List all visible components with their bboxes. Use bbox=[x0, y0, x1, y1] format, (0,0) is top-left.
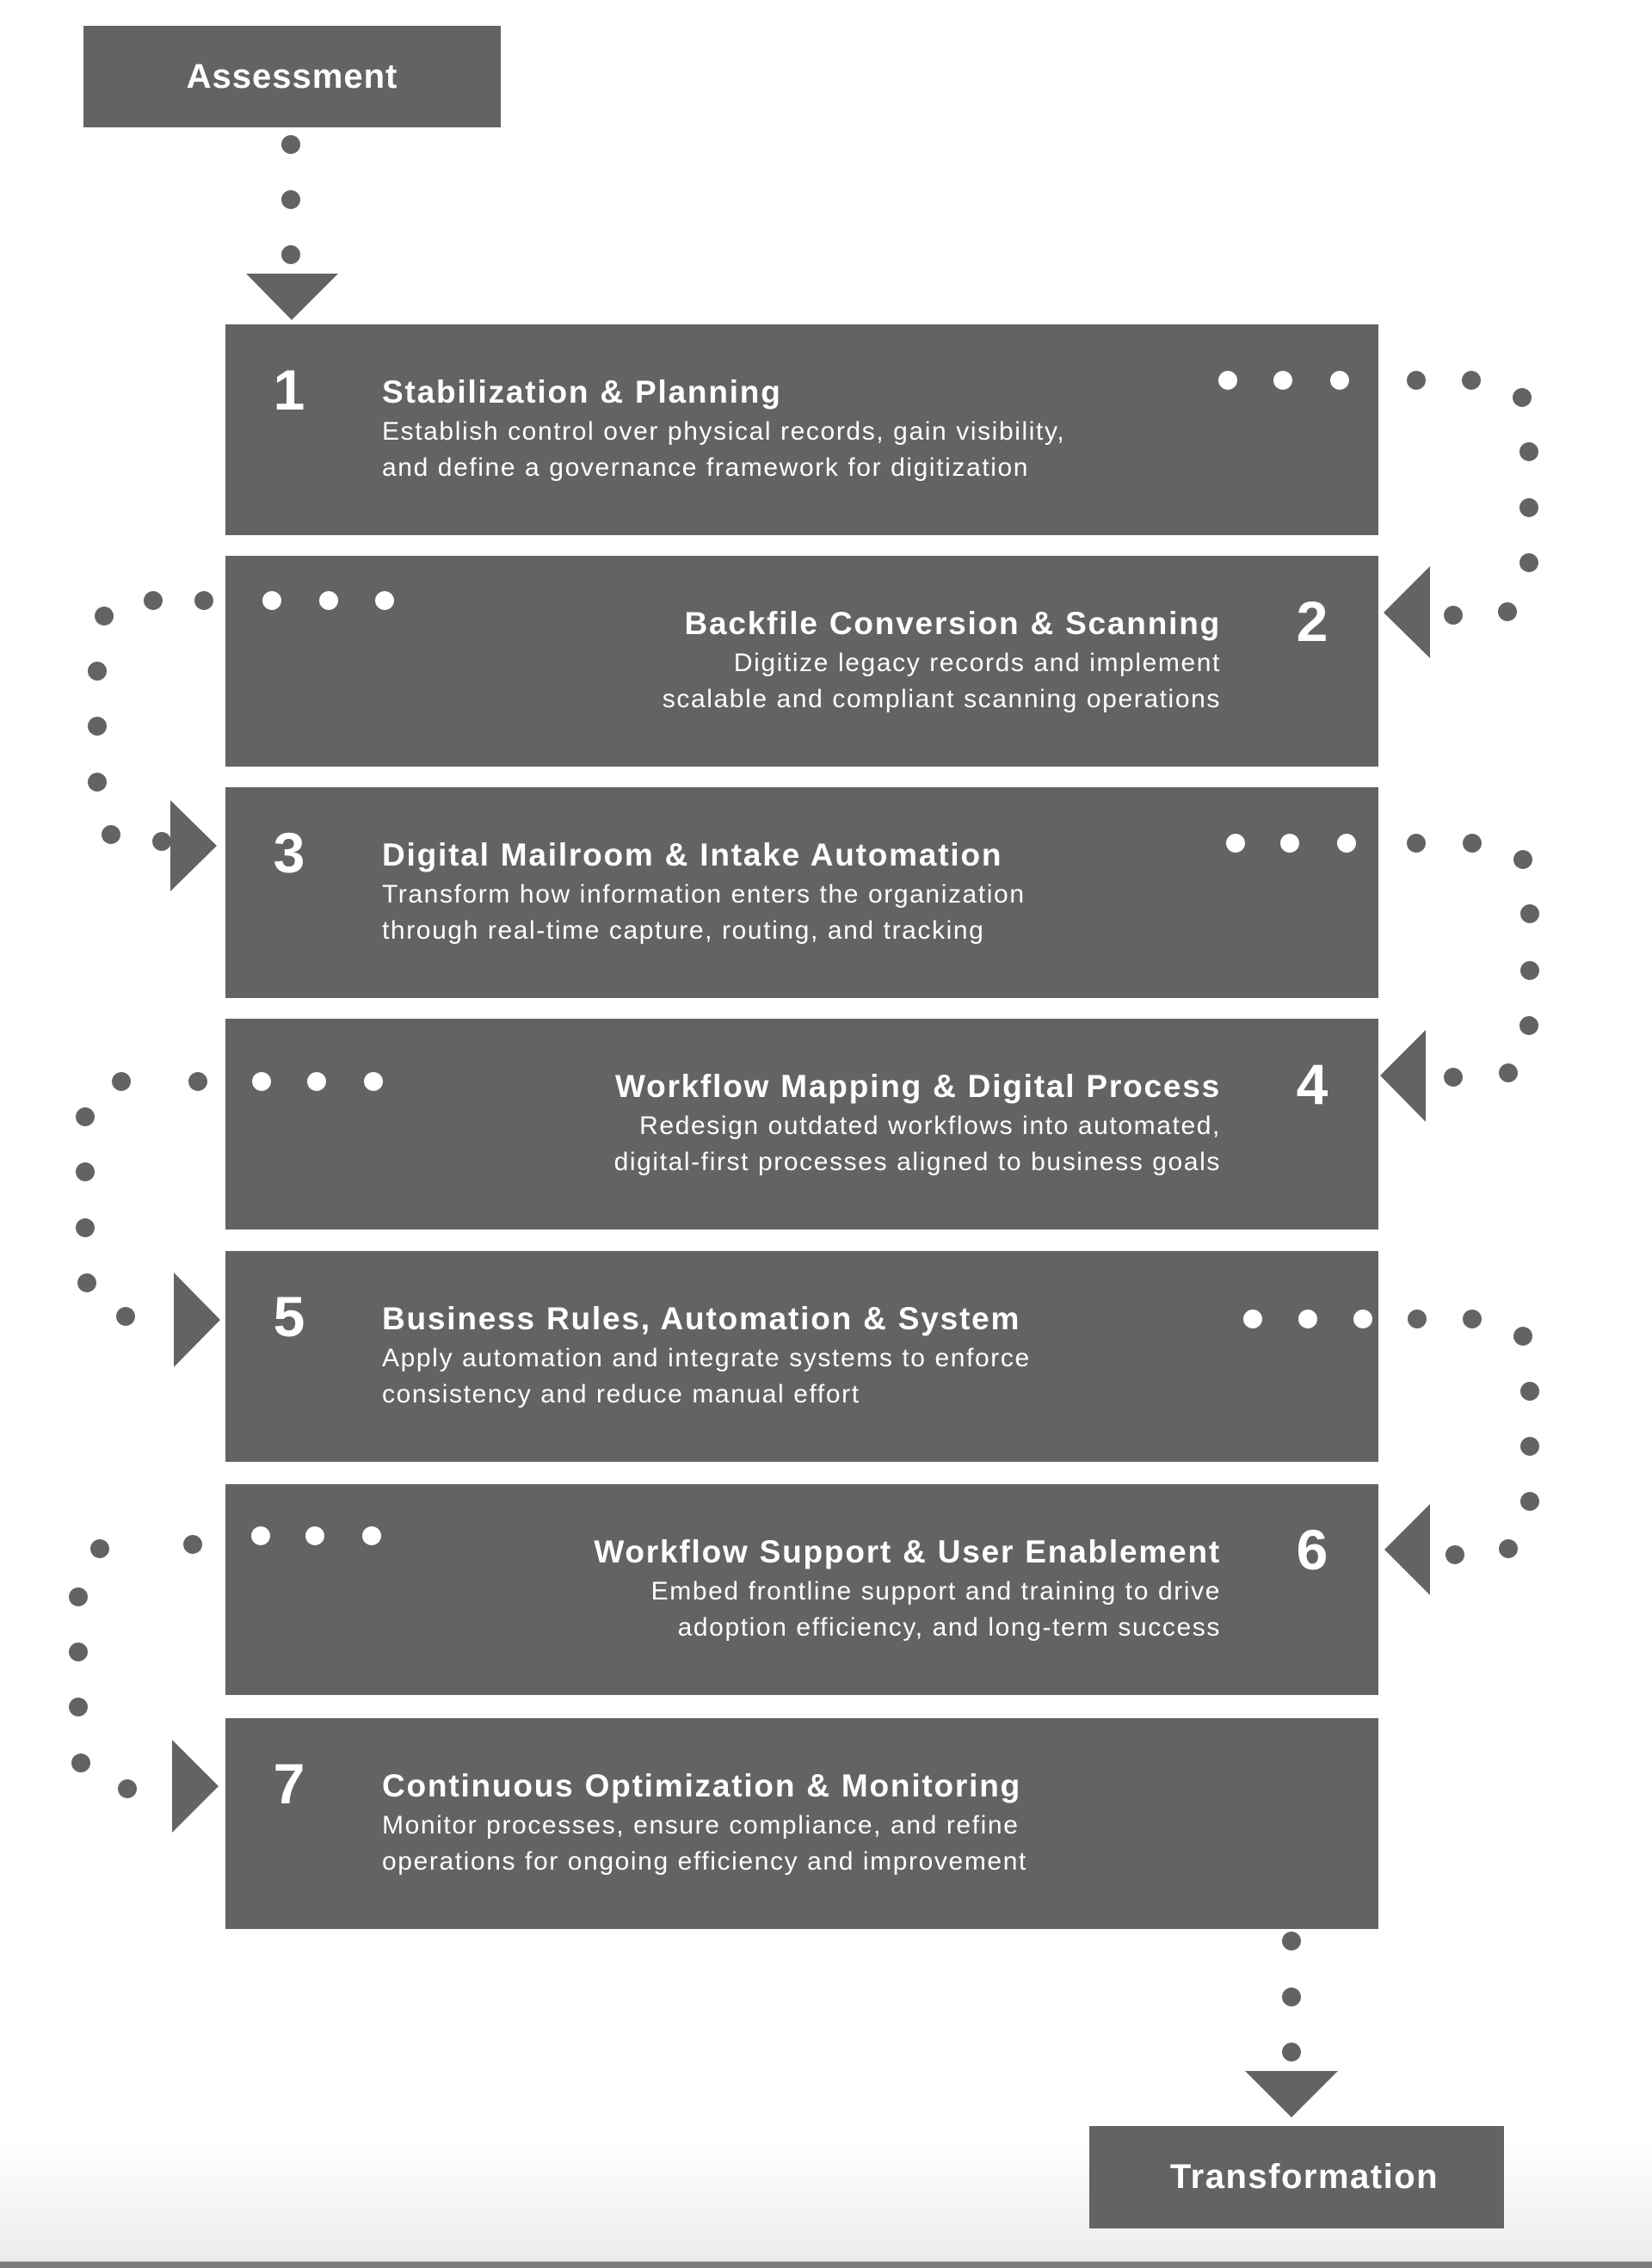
panel: step 3 bbox=[225, 787, 1378, 998]
panel: step 4: digital-first processes aligned to business goals bbox=[614, 1148, 1221, 1176]
panel: step 2: Digitize legacy records and implement bbox=[734, 649, 1221, 677]
connector: 2 to 3 bbox=[88, 591, 394, 891]
panel: step 6 bbox=[225, 1484, 1378, 1695]
connector: 6 to 7 bbox=[69, 1526, 381, 1833]
assessment box bbox=[83, 26, 501, 127]
arrow: step 7 to transformation bbox=[1245, 1932, 1338, 2117]
panel: step 3: Digital Mailroom & Intake Automation bbox=[382, 837, 1002, 872]
panel: step 1: Stabilization & Planning bbox=[382, 374, 782, 410]
panel: step 2: Backfile Conversion & Scanning bbox=[684, 606, 1221, 641]
assessment box: Assessment bbox=[187, 57, 398, 95]
panel: step 5: 5 bbox=[274, 1285, 305, 1348]
panel: step 5: consistency and reduce manual effort bbox=[382, 1380, 860, 1408]
panel: step 7: Monitor processes, ensure compliance, and refine bbox=[382, 1811, 1019, 1840]
panel: step 3: Transform how information enters the organization bbox=[382, 880, 1026, 909]
panel: step 1: and define a governance framework for digitization bbox=[382, 453, 1029, 482]
transformation box: Transformation bbox=[1170, 2158, 1439, 2196]
panel: step 2 bbox=[225, 556, 1378, 767]
panel: step 6: Workflow Support & User Enablement bbox=[594, 1534, 1221, 1569]
panel: step 6: adoption efficiency, and long-term success bbox=[678, 1613, 1221, 1642]
panel: step 7: 7 bbox=[274, 1752, 305, 1815]
panel: step 4: Workflow Mapping & Digital Process bbox=[615, 1069, 1221, 1104]
panel: step 6: 6 bbox=[1297, 1518, 1328, 1581]
panel: step 5: Business Rules, Automation & System bbox=[382, 1301, 1020, 1336]
panel: step 3: through real-time capture, routing, and tracking bbox=[382, 916, 984, 945]
panel: step 4: 4 bbox=[1297, 1052, 1328, 1116]
panel: step 7 bbox=[225, 1718, 1378, 1929]
panel: step 7: Continuous Optimization & Monitoring bbox=[382, 1768, 1021, 1803]
panel: step 2: 2 bbox=[1297, 589, 1328, 653]
panel: step 7: operations for ongoing efficiency and improvement bbox=[382, 1847, 1027, 1876]
panel: step 5: Apply automation and integrate systems to enforce bbox=[382, 1344, 1031, 1372]
arrow: assessment to step 1 bbox=[246, 135, 338, 320]
transformation box bbox=[1089, 2126, 1504, 2228]
panel: step 4: Redesign outdated workflows into automated, bbox=[639, 1112, 1221, 1140]
panel: step 5 bbox=[225, 1251, 1378, 1462]
panel: step 4 bbox=[225, 1019, 1378, 1230]
panel: step 2: scalable and compliant scanning operations bbox=[663, 685, 1221, 713]
panel: step 6: Embed frontline support and training to drive bbox=[651, 1577, 1221, 1605]
connector: 5 to 6 bbox=[1243, 1310, 1539, 1595]
connector: 1 to 2 bbox=[1218, 371, 1538, 658]
connector: 3 to 4 bbox=[1226, 834, 1539, 1122]
panel: step 1: 1 bbox=[274, 358, 305, 422]
connector: 4 to 5 bbox=[76, 1072, 383, 1367]
panel: step 1: Establish control over physical records, gain visibility, bbox=[382, 417, 1065, 446]
panel: step 3: 3 bbox=[274, 821, 305, 884]
panel: step 1 bbox=[225, 324, 1378, 535]
